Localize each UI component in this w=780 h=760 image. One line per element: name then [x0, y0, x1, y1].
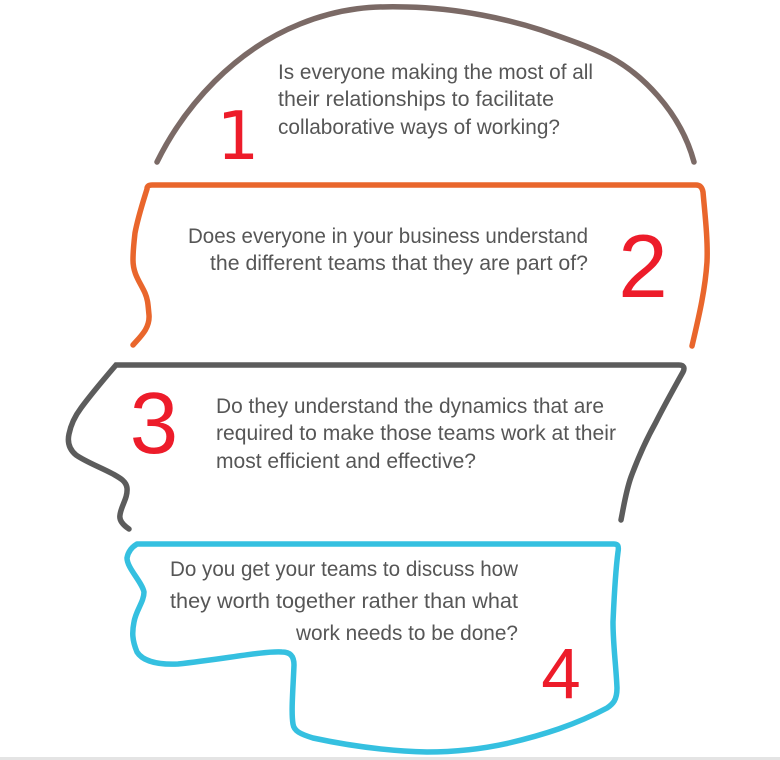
number 2: 2 — [618, 216, 668, 316]
panel 2: forehead — [133, 185, 707, 346]
outline: brown crown arc — [157, 7, 694, 162]
question 4 — [170, 558, 519, 645]
panel 3: eyes and nose — [68, 365, 684, 529]
question 1 — [278, 61, 593, 139]
outline: blue band — [127, 544, 618, 752]
question 3 — [216, 395, 616, 473]
question 2: Does everyone in your business understand — [188, 225, 588, 248]
panel 4: chin — [127, 544, 618, 752]
question 3: required to make those teams work at their — [216, 422, 616, 445]
question 2 — [188, 225, 588, 275]
question 4: they worth together rather than what — [170, 590, 518, 613]
panel 1: head crown — [157, 7, 694, 175]
question 2: the different teams that they are part of? — [210, 252, 588, 275]
number 3: 3 — [130, 375, 178, 472]
question 3: Do they understand the dynamics that are — [216, 395, 604, 418]
outline: grey band — [68, 365, 684, 529]
question 1: collaborative ways of working? — [278, 116, 560, 139]
question 4: work needs to be done? — [295, 622, 518, 645]
question 3: most efficient and effective? — [216, 450, 476, 473]
number 1: 1 — [217, 97, 259, 175]
question 4: Do you get your teams to discuss how — [170, 558, 519, 581]
number 4: 4 — [541, 635, 581, 714]
question 1: their relationships to facilitate — [278, 88, 554, 111]
question 1: Is everyone making the most of all — [278, 61, 593, 84]
outline: orange band — [133, 185, 707, 346]
